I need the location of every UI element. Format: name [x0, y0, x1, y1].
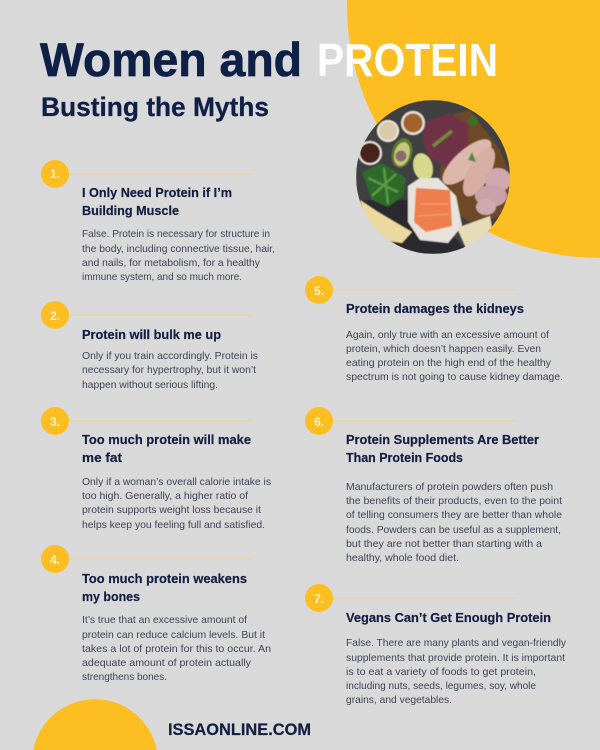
body 4: protein can reduce calcium levels. But it	[82, 630, 265, 641]
number badge 1: 1.	[50, 167, 60, 181]
body 4: adequate amount of protein actually	[82, 658, 252, 669]
body 3: Only if a woman’s overall calorie intake is	[82, 477, 271, 488]
number badge 6: 6.	[314, 415, 324, 429]
heading 4: Too much protein weakens	[82, 571, 247, 586]
body 6: the benefits of their products, even to the point	[346, 496, 562, 507]
website footer: ISSAONLINE.COM	[168, 721, 311, 739]
body 7: supplements that provide protein. It is important	[346, 653, 565, 664]
heading 2: Protein will bulk me up	[82, 327, 221, 342]
heading 5: Protein damages the kidneys	[346, 301, 524, 316]
body 4: It’s true that an excessive amount of	[82, 615, 247, 626]
panel: myth 6	[305, 407, 562, 564]
body 6	[346, 482, 562, 564]
body 6: Manufacturers of protein powders often push	[346, 482, 553, 493]
body 2	[82, 351, 258, 391]
subtitle: Busting the Myths	[41, 92, 269, 122]
panel: myth 5	[305, 276, 563, 383]
body 7: is to eat a variety of foods to get protein,	[346, 667, 536, 678]
body 1: immune system, and so much more.	[82, 272, 242, 283]
number badge 2: 2.	[50, 309, 60, 323]
body 3: protein supports weight loss because it	[82, 505, 261, 516]
body 5: Again, only true with an excessive amount of	[346, 330, 549, 341]
body 6: but they are not better than starting with a	[346, 539, 542, 550]
heading 3: me fat	[82, 450, 123, 465]
body 4: strengthens bones.	[82, 672, 167, 683]
body 6: foods. Powders can be useful as a supplement,	[346, 525, 561, 536]
body 3	[82, 477, 271, 531]
number badge 4	[41, 545, 253, 573]
heading 1: I Only Need Protein if I’m	[82, 185, 232, 200]
number badge 6	[305, 407, 516, 435]
body 7: False. There are many plants and vegan-friendly	[346, 638, 567, 649]
body 5: eating protein on the high end of the healthy	[346, 358, 552, 369]
body 4	[82, 615, 271, 683]
title	[40, 33, 498, 86]
body 7: grains, and vegetables.	[346, 695, 452, 706]
body 6: of telling consumers they are better than whole	[346, 510, 562, 521]
number badge 4: 4.	[50, 553, 60, 567]
yellow bottom circle	[33, 699, 157, 750]
heading 4: my bones	[82, 589, 140, 604]
body 5: protein, which doesn’t happen easily. Even	[346, 344, 541, 355]
heading 7: Vegans Can’t Get Enough Protein	[346, 610, 551, 625]
body 2: Only if you train accordingly. Protein is	[82, 351, 258, 362]
heading 4	[82, 571, 247, 604]
heading 6: Protein Supplements Are Better	[346, 432, 539, 447]
body 1: False. Protein is necessary for structure in	[82, 229, 270, 240]
title: Women and	[40, 33, 302, 86]
number badge 7: 7.	[314, 592, 324, 606]
title: PROTEIN	[317, 34, 498, 86]
yellow corner shape	[347, 0, 600, 258]
body 4: takes a lot of protein for this to occur. An	[82, 644, 271, 655]
body 1: and nails, for metabolism, for a healthy	[82, 258, 261, 269]
heading 6: Than Protein Foods	[346, 450, 463, 465]
body 2: happen without serious lifting.	[82, 380, 218, 391]
number badge 1	[41, 160, 253, 188]
number badge 3: 3.	[50, 415, 60, 429]
panel: myth 3	[41, 407, 271, 531]
panel: myth 1	[41, 160, 275, 283]
body 3: too high. Generally, a higher ratio of	[82, 491, 248, 502]
heading 1: Building Muscle	[82, 203, 179, 218]
panel: myth 2	[41, 301, 258, 391]
heading 3	[82, 432, 251, 465]
body 1: the body, including connective tissue, hair,	[82, 244, 275, 255]
heading 3: Too much protein will make	[82, 432, 251, 447]
number badge 5: 5.	[314, 284, 324, 298]
body 3: helps keep you feeling full and satisfied.	[82, 520, 265, 531]
body 1	[82, 229, 275, 283]
body 2: necessary for hypertrophy, but it won’t	[82, 365, 256, 376]
number badge 2	[41, 301, 253, 329]
body 5: spectrum is not going to cause kidney damage.	[346, 372, 563, 383]
body 5	[346, 330, 563, 383]
body 7	[346, 638, 567, 706]
panel: myth 7	[305, 584, 567, 706]
body 6: healthy, whole food diet.	[346, 553, 459, 564]
panel: myth 4	[41, 545, 271, 683]
body 7: including nuts, seeds, legumes, soy, whole	[346, 681, 536, 692]
heading 6	[346, 432, 539, 465]
number badge 3	[41, 407, 253, 435]
number badge 7	[305, 584, 516, 612]
food photo	[356, 100, 512, 254]
number badge 5	[305, 276, 516, 304]
heading 1	[82, 185, 232, 218]
